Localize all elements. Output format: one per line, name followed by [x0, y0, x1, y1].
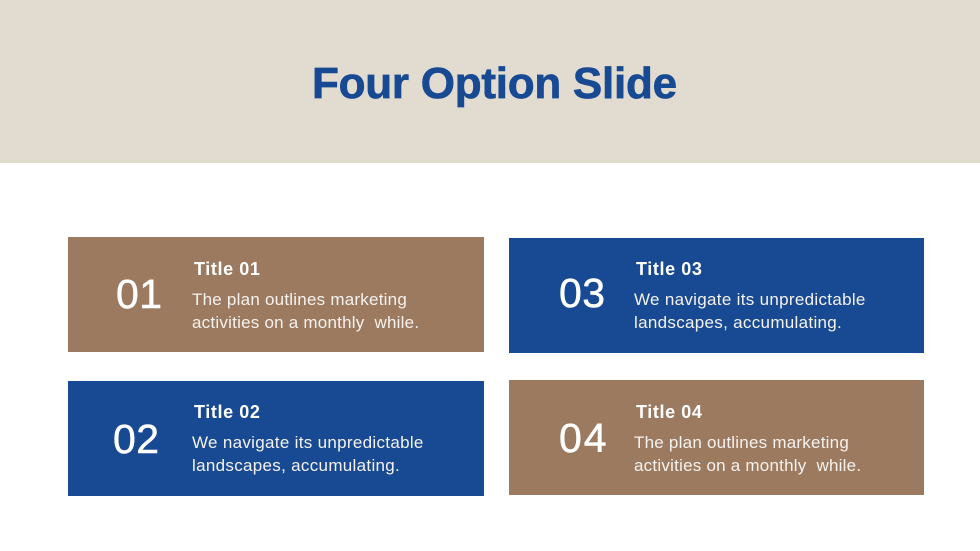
header band — [0, 0, 980, 163]
text: option 04 description: activities on a monthly while. — [634, 456, 861, 475]
heading: title 04: Title 04 — [636, 402, 702, 422]
text: option 04 description: The plan outlines marketing — [634, 433, 849, 452]
number 04: 04 — [559, 415, 609, 461]
text: option 04 description — [634, 433, 861, 475]
title: Four Option Slide — [312, 59, 677, 108]
text: option 01 description — [192, 290, 419, 332]
panel: option 04 — [509, 380, 924, 495]
text: option 03 description: landscapes, accumulating. — [634, 313, 842, 332]
text: option 02 description — [192, 433, 424, 475]
panel: option 01 — [68, 237, 484, 352]
number 02: 02 — [113, 416, 160, 462]
text: option 02 description: We navigate its unpredictable — [192, 433, 424, 452]
text: option 01 description: activities on a monthly while. — [192, 313, 419, 332]
number 01: 01 — [116, 271, 163, 317]
heading: title 01: Title 01 — [194, 259, 260, 279]
number 03: 03 — [559, 270, 606, 316]
text: option 02 description: landscapes, accumulating. — [192, 456, 400, 475]
text: option 03 description — [634, 290, 866, 332]
heading: title 02: Title 02 — [194, 402, 260, 422]
panel: option 03 — [509, 238, 924, 353]
panel: option 02 — [68, 381, 484, 496]
heading: title 03: Title 03 — [636, 259, 702, 279]
text: option 01 description: The plan outlines marketing — [192, 290, 407, 309]
text: option 03 description: We navigate its unpredictable — [634, 290, 866, 309]
